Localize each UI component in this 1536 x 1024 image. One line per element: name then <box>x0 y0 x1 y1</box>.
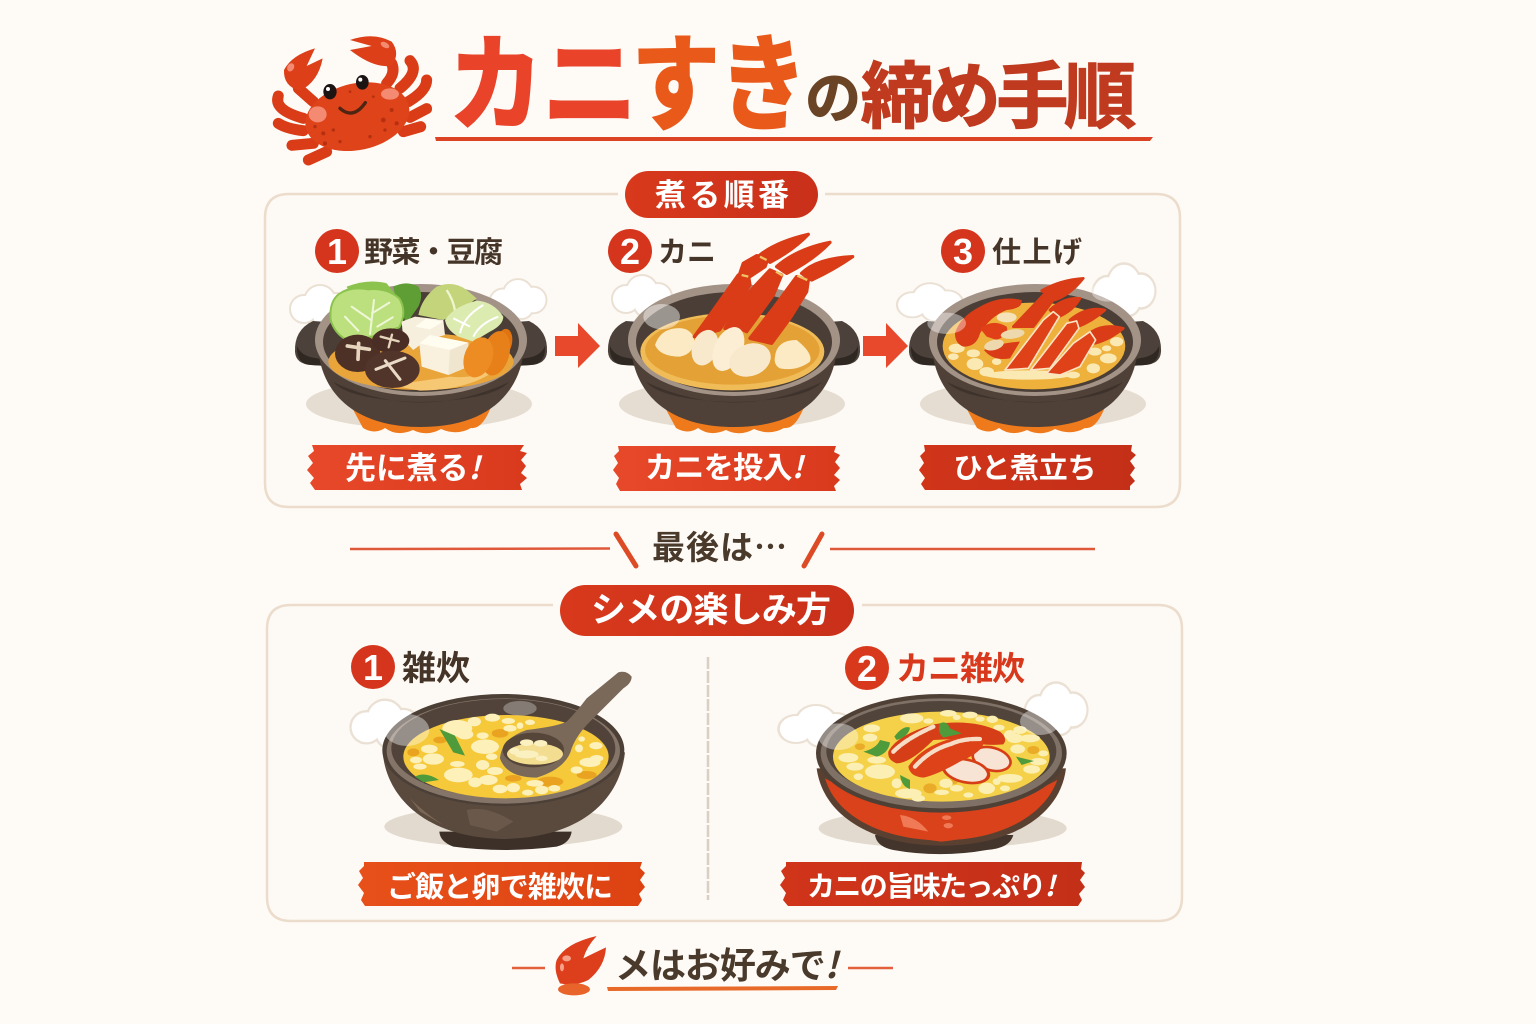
title: すき <box>632 28 807 144</box>
arrow <box>863 323 908 368</box>
arrow <box>555 323 600 368</box>
footer note: メはお好みで! <box>615 937 842 989</box>
icon: crab mascot <box>278 36 427 160</box>
step 1 label <box>315 229 503 273</box>
title: の <box>805 67 861 130</box>
option 2 label: カニ雑炊 <box>896 650 1025 687</box>
step 2 label: カニ <box>658 237 716 269</box>
option 2 caption: カニの旨味たっぷり! <box>807 865 1058 905</box>
icon: crab claw <box>556 936 606 995</box>
step 1 pot: vegetables and tofu <box>291 280 547 433</box>
heading: how to enjoy the finish: シメの楽しみ方 <box>591 591 831 630</box>
panel: cooking order <box>265 171 1180 507</box>
step 1 label: 1 <box>327 231 347 272</box>
option 1 caption <box>358 862 645 906</box>
step 3 caption: ひと煮立ち <box>954 452 1096 485</box>
panel: how to enjoy the finish <box>267 585 1182 921</box>
option 1 label: 雑炊 <box>402 650 470 688</box>
step 2 caption: カニを投入! <box>645 443 806 487</box>
option 1 label: 1 <box>363 647 383 688</box>
center divider <box>707 657 709 900</box>
heading: cooking order: 煮る順番 <box>655 178 789 213</box>
step 3 label: 仕上げ <box>992 236 1082 269</box>
step 3 pot: finished simmer <box>898 265 1161 433</box>
option 2 bowl with crab <box>780 684 1086 854</box>
step 3 label: 3 <box>953 231 973 272</box>
footer note <box>512 936 893 995</box>
option 2 label <box>845 646 1025 690</box>
heading: how to enjoy the finish <box>560 585 854 636</box>
title underline <box>435 137 1153 141</box>
title: 締め手順 <box>861 58 1136 138</box>
divider: finally <box>350 521 1095 569</box>
step 2 label <box>608 229 716 273</box>
option 1 caption: ご飯と卵で雑炊に <box>387 870 613 904</box>
step 1 caption <box>307 443 527 490</box>
step 1 caption: 先に煮る! <box>345 443 483 488</box>
option 1 label <box>351 645 470 689</box>
option 2 label: 2 <box>857 648 877 689</box>
step 1 label: 野菜・豆腐 <box>364 236 503 269</box>
divider: finally: 最後は… <box>652 521 787 569</box>
step 3 label <box>941 229 1082 273</box>
title: カニ <box>449 28 637 144</box>
title <box>449 28 1136 144</box>
step 2 pot: crab legs added <box>608 234 860 433</box>
option 1 bowl with ladle <box>352 672 632 850</box>
step 3 caption <box>919 445 1136 490</box>
heading: cooking order <box>625 171 818 218</box>
step 2 label: 2 <box>620 231 640 272</box>
step 2 caption <box>613 443 840 491</box>
